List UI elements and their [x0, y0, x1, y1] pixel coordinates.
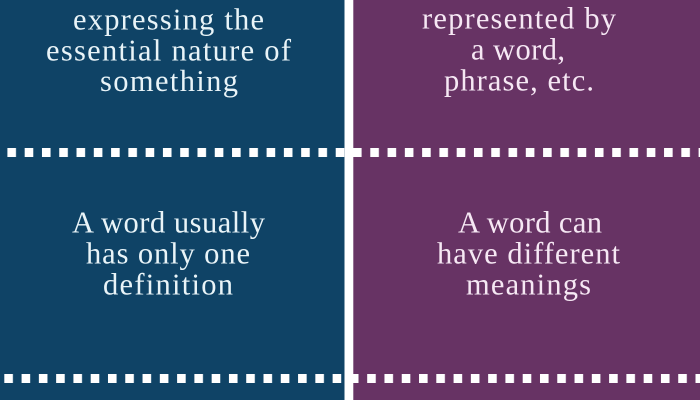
text: meaning row two: A word can	[458, 206, 602, 240]
panel: meaning column	[353, 0, 700, 400]
text: meaning row two: have different	[437, 236, 621, 270]
text: definition row two: has only one	[86, 236, 250, 270]
text: definition row two: definition	[103, 268, 233, 302]
text: definition row two: A word usually	[72, 206, 266, 240]
text: meaning row one: a word,	[471, 32, 565, 66]
text: meaning row two	[437, 206, 621, 302]
text: meaning row two: meanings	[466, 268, 591, 302]
text: definition row two	[72, 206, 266, 302]
panel: definition column	[0, 0, 344, 400]
text: meaning row one: represented by	[422, 2, 617, 36]
divider: top dotted row	[0, 148, 700, 157]
text: definition row one: expressing the	[73, 2, 264, 36]
text: meaning row one	[422, 2, 617, 98]
text: definition row one: something	[100, 64, 238, 98]
divider: bottom dotted row	[0, 374, 700, 383]
text: definition row one: essential nature of	[46, 34, 292, 68]
text: definition row one	[46, 2, 292, 98]
text: meaning row one: phrase, etc.	[444, 64, 594, 98]
